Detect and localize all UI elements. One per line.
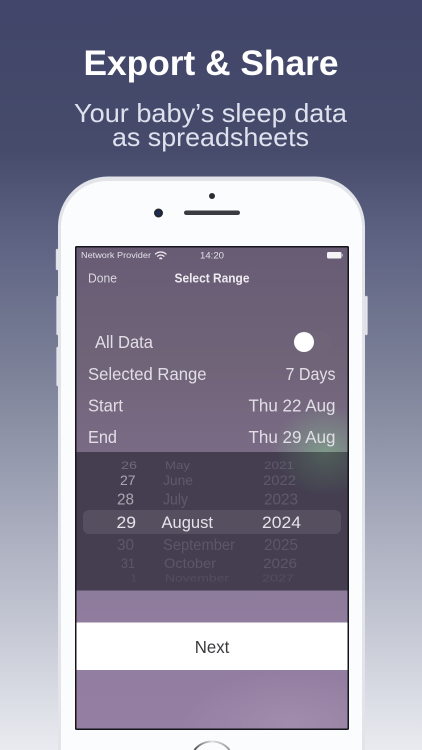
- row 29 selected: August: [162, 513, 213, 532]
- time: 14:20: [200, 250, 224, 260]
- row 28: 28: [117, 492, 134, 508]
- icon: battery: [327, 252, 343, 258]
- selection band: [83, 510, 341, 534]
- row 30: 30: [117, 537, 134, 554]
- row 26: 2021: [264, 460, 294, 472]
- row 29 selected: 29: [116, 513, 136, 532]
- row 31: 2026: [263, 555, 297, 571]
- row: end: End: [88, 427, 117, 447]
- row: end: Thu 29 Aug: [248, 427, 336, 447]
- wheel rows: [116, 460, 301, 584]
- row 29 selected: [117, 516, 300, 532]
- row: end: [89, 430, 334, 446]
- row 28: 2023: [264, 492, 298, 508]
- picker glow: [288, 452, 348, 486]
- subtitle: Your baby’s sleep data: [74, 98, 348, 128]
- row 26: May: [165, 460, 191, 472]
- row 30: 2025: [264, 537, 298, 554]
- row: all data: All Data: [95, 332, 153, 352]
- row: selected range: [88, 367, 335, 384]
- row 30: September: [163, 537, 235, 554]
- side buttons: [56, 249, 368, 386]
- next button: [76, 622, 348, 670]
- status bar: [82, 251, 343, 260]
- row: selected range: Selected Range: [88, 364, 206, 384]
- row 31: [122, 558, 296, 568]
- date picker: [76, 452, 348, 590]
- row 31: October: [164, 555, 216, 571]
- row 26: 26: [121, 460, 137, 472]
- toggle: [294, 332, 314, 352]
- row 28: [118, 493, 298, 508]
- nav: title: Select Range: [174, 272, 250, 286]
- row 28: July: [163, 492, 188, 508]
- row: all data: [95, 332, 314, 352]
- row 1: 2027: [262, 574, 295, 584]
- speaker: [184, 210, 240, 215]
- screen: [76, 248, 348, 728]
- row 30: [118, 538, 298, 554]
- row 27: 27: [120, 472, 136, 488]
- title: Export & Share: [84, 43, 338, 83]
- front camera: [154, 208, 163, 218]
- row: selected range: 7 Days: [286, 364, 336, 384]
- screen bezel: [75, 246, 349, 730]
- phone: [56, 176, 400, 750]
- subtitle: [74, 98, 348, 152]
- row 27: 2022: [263, 472, 296, 488]
- row: start: Thu 22 Aug: [248, 396, 336, 416]
- row 1: [132, 574, 294, 582]
- phone body: [58, 176, 365, 750]
- row 29 selected: 2024: [262, 513, 301, 532]
- row 26: [122, 462, 294, 472]
- row 1: November: [165, 574, 230, 584]
- row 27: June: [163, 472, 193, 488]
- home button: [194, 742, 230, 750]
- icon: wifi: [156, 252, 166, 258]
- next button: Next: [195, 637, 229, 657]
- subtitle: as spreadsheets: [112, 122, 309, 152]
- carrier: Network Provider: [81, 250, 151, 260]
- wallpaper: [76, 247, 348, 729]
- row 31: 31: [121, 555, 135, 571]
- row: start: Start: [88, 396, 123, 416]
- row 1: 1: [131, 574, 137, 584]
- sensor dot: [209, 193, 215, 199]
- nav: done: Done: [88, 272, 117, 286]
- picker panel: [76, 452, 348, 590]
- row: start: [88, 398, 334, 415]
- row 27: [120, 476, 296, 485]
- settings rows: [88, 331, 336, 447]
